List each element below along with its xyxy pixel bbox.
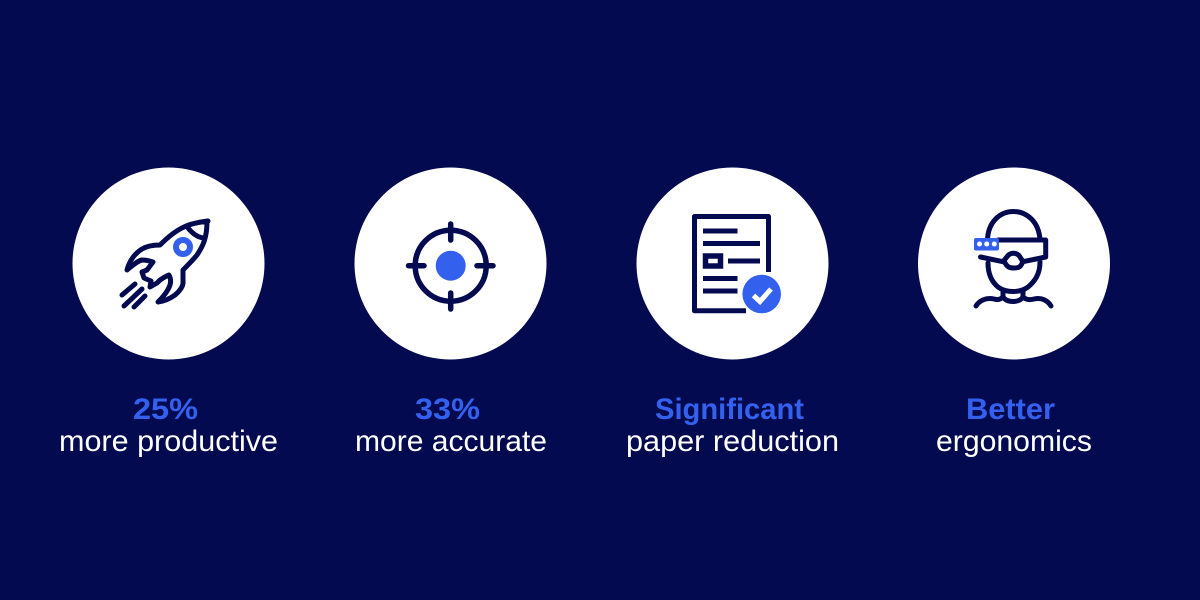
panel: 33% more accurate: [354, 168, 547, 458]
icon: document with check: [694, 216, 783, 316]
white circle: headset: [918, 168, 1110, 360]
label: significant paper reduction: paper reduction: [626, 425, 839, 458]
label: 25% more productive: [59, 393, 278, 458]
icon: person with headset: [974, 212, 1051, 306]
label: better ergonomics: ergonomics: [936, 425, 1092, 458]
label: 25% more productive: more productive: [59, 425, 278, 458]
white circle: document: [636, 168, 828, 360]
icon: rocket: [122, 221, 208, 307]
panel: 25% more productive: [59, 168, 278, 458]
label: 33% more accurate: 33%: [415, 393, 480, 426]
label: 33% more accurate: more accurate: [355, 425, 547, 458]
panel: significant paper reduction: [626, 168, 839, 458]
white circle: target: [354, 168, 546, 360]
panel: better ergonomics: [918, 168, 1110, 458]
white circle: rocket: [72, 168, 264, 360]
label: significant paper reduction: [626, 393, 839, 458]
label: significant paper reduction: Significant: [655, 393, 804, 426]
icon: target: [408, 224, 493, 309]
label: 33% more accurate: [355, 393, 547, 458]
label: better ergonomics: [936, 393, 1092, 458]
label: 25% more productive: 25%: [133, 393, 198, 426]
label: better ergonomics: Better: [966, 393, 1055, 426]
